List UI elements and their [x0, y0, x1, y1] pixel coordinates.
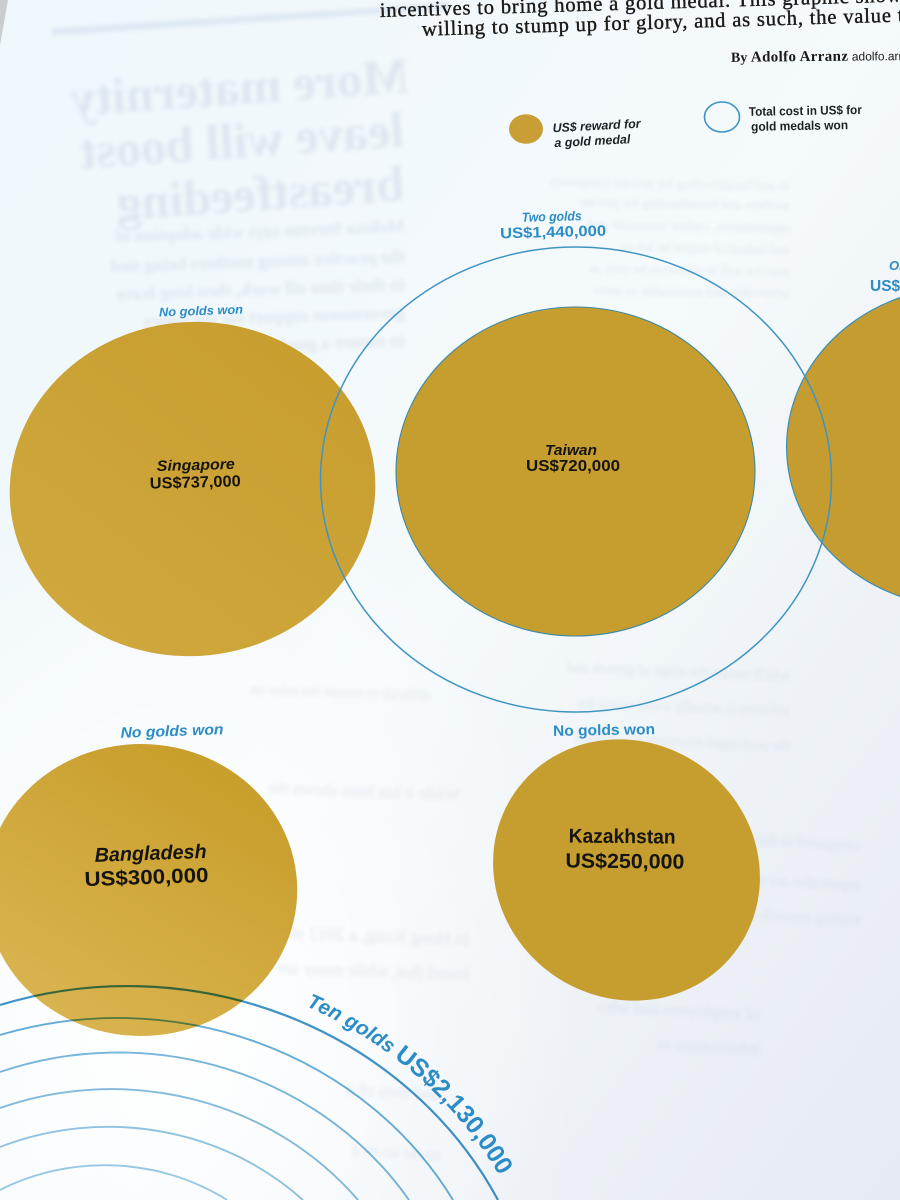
show-through text from the reverse page: While it has been shown the — [268, 778, 461, 804]
show-through text from the reverse page: trading towards the end of the week — [631, 900, 861, 929]
label: Taiwan two golds — [500, 208, 606, 242]
label: right-hand country partial: US$ — [870, 278, 900, 295]
show-through text from the reverse page: Melissa Stevens says wide adoption of — [114, 216, 405, 246]
legend: gold reward: a gold medal — [554, 132, 631, 150]
legend: blue total cost: Total cost in US$ for — [749, 103, 862, 119]
legend: blue total cost — [704, 102, 862, 134]
label: Kazakhstan: Kazakhstan — [569, 825, 676, 849]
curved label: ten golds: Ten golds US$2,130,000 — [309, 994, 512, 1173]
label: Taiwan: US$720,000 — [526, 458, 620, 475]
circle: Bangladesh reward — [0, 744, 297, 1036]
show-through text from the reverse page: of employees and who — [598, 996, 761, 1024]
concentric rings: ten golds total cost — [0, 986, 498, 1200]
show-through text from the reverse page: which means the stage of growth and — [566, 660, 790, 684]
label: Singapore: US$737,000 — [150, 473, 241, 493]
label: Taiwan two golds: Two golds — [522, 208, 582, 225]
show-through text from the reverse page: difficult to ensure the rules on — [249, 682, 430, 704]
show-through text from the reverse page: inflation is actually a real worry for — [577, 696, 790, 719]
show-through text from the reverse page: practice will be shown to be only as — [589, 261, 790, 280]
circle: right-hand country gold disc — [787, 297, 900, 597]
label: Singapore no golds: No golds won — [159, 303, 244, 319]
legend: blue total cost: gold medals won — [751, 118, 848, 134]
show-through text from the reverse page: the prolonged downturn of a market — [573, 730, 790, 754]
show-through text from the reverse page: found that, while many are — [277, 957, 471, 984]
show-through text from the reverse page: mothers and breastfeeding for private — [580, 195, 790, 214]
label: Taiwan — [526, 442, 620, 475]
circle: Singapore reward — [0, 304, 392, 674]
show-through text from the reverse page: government support for the policy — [142, 302, 405, 331]
label: Singapore — [149, 456, 241, 493]
show-through text from the reverse page: and then of a — [346, 1079, 441, 1104]
circle: Kazakhstan reward — [442, 687, 811, 1053]
show-through text from the reverse page: compared to the base of what is in a — [630, 825, 861, 854]
label: Bangladesh — [83, 841, 209, 891]
label: Kazakhstan no golds: No golds won — [553, 721, 655, 740]
label: Kazakhstan — [565, 825, 685, 874]
label: Bangladesh no golds: No golds won — [120, 721, 224, 742]
legend: gold reward — [509, 114, 643, 150]
show-through text from the reverse page: and industrial output be left to — [621, 240, 790, 258]
show-through text from the reverse page: in and breastfeeding for private companies — [551, 175, 790, 194]
label: Bangladesh: US$300,000 — [84, 864, 209, 891]
show-through text from the reverse page: to ensure a good start for a child — [156, 330, 405, 359]
show-through text from the reverse page: the practice among mothers being tied — [110, 246, 405, 276]
label: Taiwan two golds: US$1,440,000 — [500, 223, 606, 242]
circle: Taiwan reward — [396, 307, 755, 636]
label: Bangladesh: Bangladesh — [94, 841, 207, 867]
show-through text from the reverse page: to their time off work, then long leave — [116, 274, 405, 304]
label: Kazakhstan: US$250,000 — [565, 849, 684, 874]
label: right-hand country partial — [870, 258, 900, 295]
show-through text from the reverse page: achievable and sustainable as more — [593, 284, 790, 302]
legend: gold reward: US$ reward for — [552, 117, 642, 135]
show-through text from the reverse page: report also are used and in which — [649, 866, 861, 894]
show-through text from the reverse page: opportunities, carbon monoxide and — [588, 217, 790, 236]
show-through text from the reverse page: More maternity — [68, 47, 411, 127]
show-through text from the reverse page: breastfeeding — [115, 155, 406, 231]
show-through text from the reverse page: leave will boost — [77, 101, 406, 180]
label: Taiwan: Taiwan — [545, 442, 597, 459]
show-through text from the reverse page: In Hong Kong, a 2012 study — [265, 922, 471, 949]
show-through text from the reverse page: information to — [656, 1034, 761, 1059]
show-through text from the reverse page: to do so in a — [352, 1139, 441, 1164]
ring: Taiwan total cost — [320, 247, 832, 712]
label: Singapore: Singapore — [157, 456, 235, 475]
